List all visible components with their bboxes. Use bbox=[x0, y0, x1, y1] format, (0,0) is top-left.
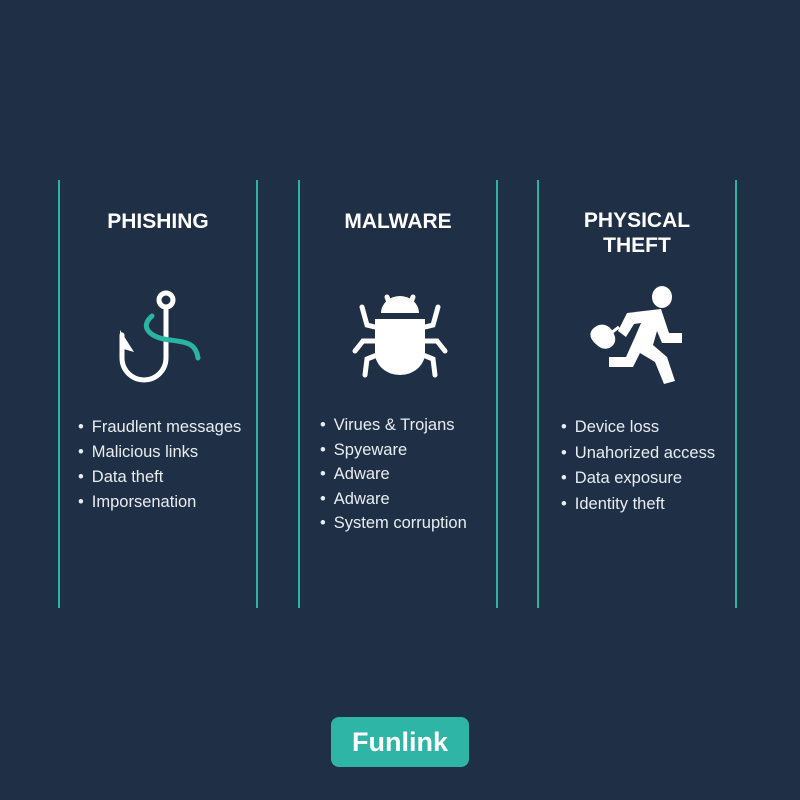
heading: phishing: PHISHING bbox=[107, 210, 209, 233]
list: malware bbox=[320, 416, 467, 532]
heading: malware: MALWARE bbox=[344, 210, 452, 233]
list: physical theft: Data exposure bbox=[575, 469, 682, 487]
list: malware: Adware bbox=[334, 490, 390, 508]
list: physical theft: Unahorized access bbox=[575, 444, 715, 462]
list: phishing: Data theft bbox=[92, 468, 163, 486]
logo: Funlink bbox=[331, 717, 469, 767]
list: physical theft bbox=[562, 418, 715, 512]
list: phishing: Fraudlent messages bbox=[92, 418, 241, 436]
list: malware: Virues & Trojans bbox=[334, 416, 455, 434]
icon: bug bbox=[352, 294, 448, 378]
list: phishing: Malicious links bbox=[92, 443, 198, 461]
list: phishing bbox=[78, 418, 241, 511]
list: malware: Spyeware bbox=[334, 440, 407, 458]
icon: fishing hook bbox=[120, 290, 200, 382]
heading: physical theft: THEFT bbox=[603, 234, 671, 257]
heading: physical theft: PHYSICAL bbox=[584, 209, 690, 232]
list: malware: Adware bbox=[334, 465, 390, 483]
list: physical theft: Identity theft bbox=[575, 494, 665, 512]
icon: running thief bbox=[590, 286, 682, 384]
list: physical theft: Device loss bbox=[575, 418, 659, 436]
logo: Funlink: Funlink bbox=[352, 727, 448, 757]
list: malware: System corruption bbox=[334, 514, 467, 532]
divider lines bbox=[58, 180, 60, 608]
heading: physical theft bbox=[584, 209, 690, 257]
list: phishing: Imporsenation bbox=[92, 493, 196, 511]
